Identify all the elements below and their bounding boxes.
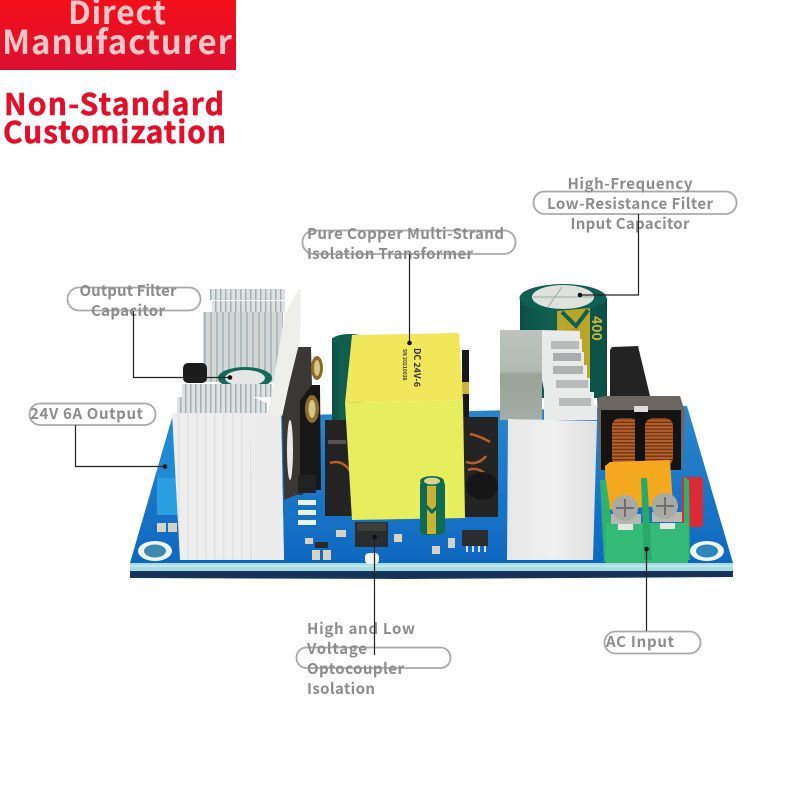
callout: output filter capacitor: Capacitor [91, 300, 165, 321]
heading: non-standard customization [3, 80, 226, 152]
callout: 24V 6A output [30, 403, 167, 469]
rear heat sink left [203, 289, 285, 382]
callout: optocoupler isolation: High and Low [307, 618, 415, 639]
transistors on heat sink [282, 347, 321, 500]
isolation transformer [345, 333, 465, 520]
AC input terminal block [600, 477, 690, 563]
rear right heat sink [500, 330, 597, 420]
small electrolytic capacitor [420, 476, 445, 535]
common mode inductor [597, 396, 685, 470]
banner: direct manufacturer: Manufacturer [2, 16, 233, 64]
black windings left [325, 420, 355, 516]
mounting hole left [138, 541, 172, 561]
black rectifier [610, 346, 650, 396]
callout: high-frequency capacitor: Low-Resistance Filter [547, 193, 713, 214]
callout: AC input: AC Input [605, 631, 675, 652]
black choke [183, 363, 207, 383]
yellow safety capacitor [605, 460, 673, 510]
PCB front edge [130, 563, 733, 571]
board shadow [130, 570, 733, 579]
banner: direct manufacturer [0, 0, 236, 70]
output filter capacitor [218, 367, 272, 389]
callout: high-frequency capacitor: Input Capacitor [570, 213, 690, 234]
heading: non-standard customization: Customization [3, 108, 226, 152]
isolation transformer: SN 20210026 [401, 349, 408, 381]
driver chip [448, 530, 488, 552]
input filter capacitor [520, 284, 607, 398]
front right heat sink [507, 419, 597, 560]
callout: optocoupler isolation: Voltage [306, 638, 367, 659]
callout: optocoupler isolation [296, 535, 450, 699]
black windings right [462, 350, 498, 517]
callout: high-frequency capacitor: High-Frequency [568, 173, 693, 194]
callout: optocoupler isolation: Isolation [307, 678, 375, 699]
callout: isolation transformer: Isolation Transformer [307, 243, 473, 264]
isolation transformer: DC 24V-6 [411, 348, 424, 387]
heading: non-standard customization: Non-Standard [4, 80, 224, 124]
callout: AC input [604, 547, 700, 654]
terminal screws [611, 493, 682, 530]
red safety capacitor [682, 477, 703, 527]
PCB surface [130, 406, 733, 563]
rear green capacitor [332, 334, 368, 430]
product: power supply circuit board [130, 284, 733, 579]
front heat sink left [172, 289, 301, 560]
surface mount components left [157, 500, 440, 560]
input filter capacitor: 400 [587, 316, 607, 341]
callout: optocoupler isolation: Optocoupler [307, 658, 404, 679]
optocoupler [355, 522, 388, 564]
callout: isolation transformer: Pure Copper Multi-Strand [307, 223, 504, 244]
callout: high-frequency capacitor [534, 173, 736, 297]
output terminal block [157, 428, 180, 515]
screws [305, 356, 323, 423]
mounting hole right [690, 541, 724, 561]
callout: 24V 6A output: 24V 6A Output [30, 403, 144, 424]
callout: isolation transformer [302, 223, 516, 345]
callout: output filter capacitor: Output Filter [80, 280, 177, 301]
callout: output filter capacitor [68, 280, 232, 380]
